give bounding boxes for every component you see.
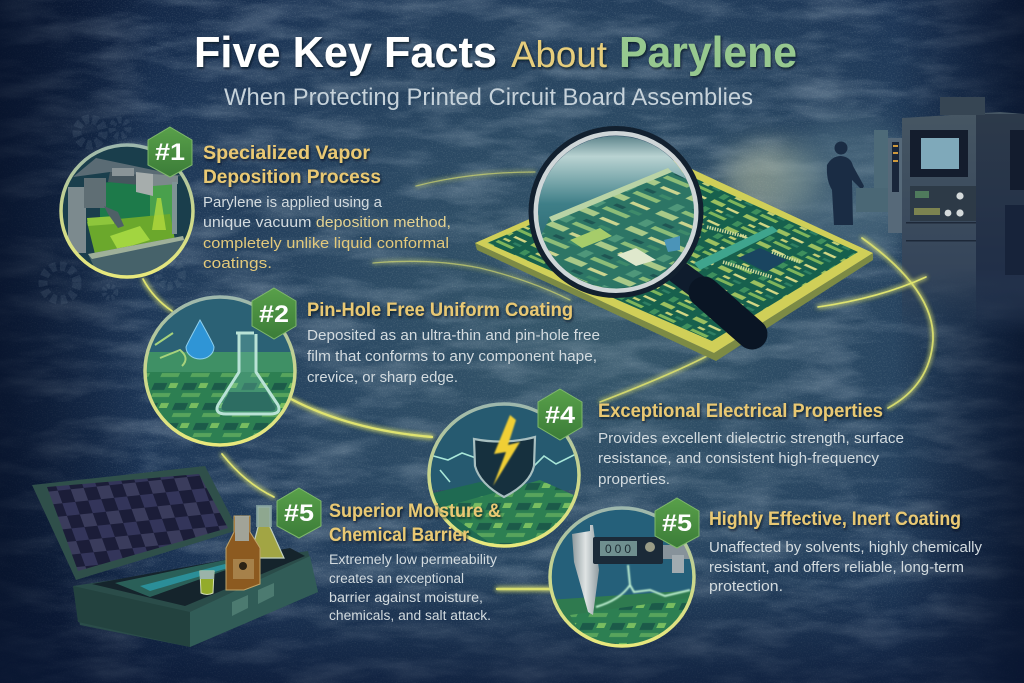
caliper display: 000 (605, 542, 631, 556)
fact 2: pin-hole free uniform coating (140, 288, 600, 448)
heading: Deposition Process (203, 167, 381, 188)
board thickness (475, 243, 873, 361)
caliper body (593, 537, 663, 564)
lens view (538, 136, 694, 288)
small beaker (200, 571, 214, 594)
title (194, 28, 797, 77)
body text: resistance, and consistent high-frequency (598, 451, 880, 467)
magnifying glass (520, 125, 790, 334)
case lid (32, 466, 238, 580)
handle (678, 272, 752, 334)
badge #2 (252, 288, 296, 339)
shield (474, 437, 535, 497)
equipment case (32, 466, 318, 647)
circle illustration: deposition chamber (60, 145, 194, 280)
fact 5: superior moisture and chemical barrier (32, 466, 501, 647)
background panel (874, 130, 888, 192)
machine screen (910, 130, 968, 177)
badge #5 (655, 498, 699, 548)
body text: properties. (598, 472, 670, 488)
fact 1: specialized vapor deposition process (60, 127, 451, 280)
badge #1 (148, 127, 192, 177)
side column (888, 138, 902, 233)
fact 5b: highly effective, inert coating (548, 498, 983, 650)
body text: Extremely low permeability (329, 552, 497, 567)
body text (598, 431, 904, 488)
body text: Parylene is applied using a (203, 195, 383, 211)
circle illustration: digital caliper (548, 505, 700, 650)
body text (203, 195, 451, 272)
caliper jaw (572, 525, 599, 615)
case interior (92, 548, 305, 606)
lightning bolt (493, 415, 520, 486)
body text: crevice, or sharp edge. (307, 370, 458, 386)
heading: Exceptional Electrical Properties (598, 401, 883, 422)
title: Five Key Facts (194, 28, 497, 77)
water drop (186, 320, 214, 359)
operator silhouette (827, 142, 864, 225)
body text: Provides excellent dielectric strength, surface (598, 431, 904, 447)
dark chip (738, 248, 787, 272)
body text (307, 328, 600, 386)
body text: chemicals, and salt attack. (329, 608, 491, 623)
machine body (902, 112, 1024, 335)
body text: Deposited as an ultra-thin and pin-hole free (307, 328, 600, 344)
connector curves (143, 172, 933, 589)
title: Parylene (619, 28, 797, 77)
body text: resistant, and offers reliable, long-term (709, 560, 964, 576)
badge #5 (277, 488, 321, 538)
badge #5: #5 (284, 500, 314, 527)
badge #4 (538, 389, 582, 440)
body text: creates an exceptional (329, 571, 464, 586)
body text: protection. (709, 579, 783, 595)
control panel (910, 186, 976, 221)
heading: Specialized Vapor (203, 143, 371, 164)
heading: Superior Moisture & (329, 501, 501, 522)
badge #1: #1 (155, 139, 185, 166)
body text: barrier against moisture, (329, 590, 483, 605)
background machine and operator (827, 97, 1024, 335)
body text: unique vacuum deposition method, (203, 215, 451, 231)
case body (73, 551, 318, 647)
heading: Highly Effective, Inert Coating (709, 509, 961, 530)
badge #2: #2 (259, 301, 289, 328)
badge #5: #5 (662, 510, 692, 537)
subtitle: When Protecting Printed Circuit Board Assemblies (224, 84, 753, 111)
teal trace (694, 226, 778, 270)
board surface (487, 166, 858, 341)
body text: coatings. (203, 256, 272, 272)
title: About (511, 34, 608, 75)
heading (203, 143, 381, 188)
clasps (232, 583, 274, 616)
circle illustration: shield and lightning (425, 400, 585, 550)
heading (329, 501, 501, 546)
green flask (250, 507, 284, 558)
lens rim (536, 133, 696, 291)
circle illustration: water drop and flask (140, 295, 300, 448)
body text (329, 552, 497, 623)
foam lining (47, 474, 228, 571)
caliper display (600, 541, 637, 556)
body text: Unaffected by solvents, highly chemically (709, 540, 983, 556)
board edge (475, 158, 873, 353)
heading: Chemical Barrier (329, 525, 470, 546)
chip leads (707, 227, 800, 277)
body text: completely unlike liquid conformal (203, 236, 449, 252)
body text: film that conforms to any component hape, (307, 349, 597, 365)
body text (709, 540, 983, 595)
fact 4: exceptional electrical properties (425, 389, 904, 550)
badge #4: #4 (545, 402, 576, 429)
decorative gears (43, 119, 182, 300)
printed circuit board (475, 158, 873, 361)
amber bottle (226, 516, 260, 590)
flask (217, 333, 279, 414)
heading: Pin-Hole Free Uniform Coating (307, 300, 573, 321)
